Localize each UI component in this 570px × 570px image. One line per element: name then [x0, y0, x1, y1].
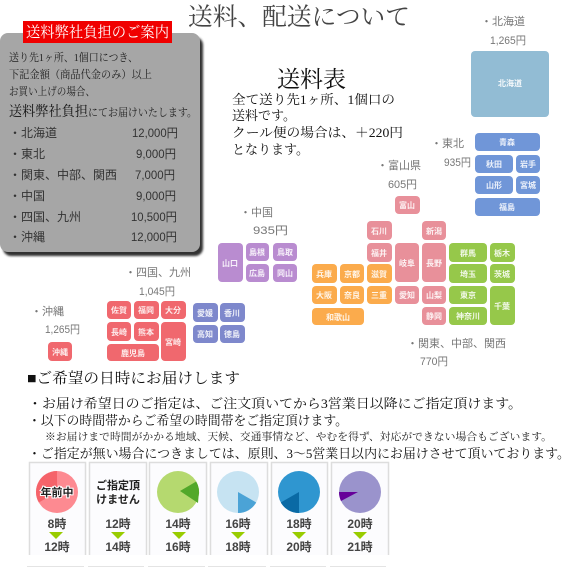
delivery notes: ※お届けまで時間がかかる地域、天候、交通事情など、やむを得ず、対応ができない場合もございます。 — [45, 430, 552, 443]
map: Shikoku: 香川 — [224, 308, 240, 318]
card: 14 to 16 — [150, 462, 206, 555]
card: 12 to 14 unavailable: 12時 — [105, 516, 131, 531]
label: Tohoku price — [431, 137, 471, 169]
panel price list: ・関東、中部、関西 — [9, 167, 117, 182]
map: Tohoku: 秋田 — [486, 159, 502, 169]
shipping table note — [232, 92, 403, 157]
map: Kanto — [449, 243, 515, 325]
map: Kansai: 大阪 — [316, 290, 332, 300]
card: 20 to 21: 21時 — [347, 539, 373, 554]
map: Tohoku: 山形 — [486, 180, 502, 190]
map: Tohoku: 岩手 — [520, 159, 536, 169]
map: Chubu: 愛知 — [399, 290, 415, 300]
delivery notes — [28, 396, 570, 461]
panel: free shipping guide — [0, 21, 203, 256]
map: Chugoku: 広島 — [249, 268, 265, 278]
label: Tohoku price: 935円 — [444, 157, 471, 169]
panel price list: 7,000円 — [135, 168, 175, 182]
card: 20 to 21 — [332, 462, 388, 555]
label: Hokkaido price: 1,265円 — [490, 35, 526, 47]
map: Chubu: 新潟 — [426, 226, 442, 236]
shipping table note: となります。 — [232, 142, 309, 157]
card: 8 to 12: 年前中 — [40, 485, 74, 499]
map: Hokkaido: 北海道 — [498, 78, 522, 88]
map: Toyama — [395, 196, 420, 214]
shipping table note: 全て送り先1ヶ所、1個口の — [232, 92, 395, 107]
panel intro text: 下記金額（商品代金のみ）以上 — [9, 67, 152, 81]
card: 8 to 12: 8時 — [48, 516, 66, 531]
panel heading: red label: 送料弊社負担のご案内 — [26, 24, 169, 41]
map: Chubu: 福井 — [371, 248, 387, 258]
map: Kanto: 茨城 — [494, 269, 510, 279]
map: Chugoku: 岡山 — [277, 269, 293, 278]
card: 18 to 20: 18時 — [286, 516, 312, 531]
card: 16 to 18: 18時 — [225, 539, 251, 554]
panel intro text: お買い上げの場合、 — [9, 84, 95, 98]
panel heading: red label — [23, 21, 172, 43]
map: Kanto: 栃木 — [494, 248, 510, 258]
card: 14 to 16: 14時 — [165, 516, 191, 531]
label: Chugoku price: ・中国 — [240, 206, 273, 219]
label: Toyama price: ・富山県 — [377, 159, 421, 172]
map: Kanto: 東京 — [460, 290, 476, 300]
panel price list: 12,000円 — [132, 126, 178, 140]
label: Hokkaido price — [481, 14, 526, 47]
card: 8 to 12: 12時 — [44, 539, 70, 554]
label: Kanto, Chubu, Kansai price — [407, 337, 506, 368]
panel price list: 10,500円 — [131, 210, 177, 224]
map: Kyushu: 佐賀 — [111, 305, 127, 315]
label: Hokkaido price: ・北海道 — [481, 14, 525, 28]
panel intro text: 送り先1ヶ所、1個口につき、 — [9, 50, 138, 64]
map: Kanto, Chubu, Kansai — [312, 221, 515, 325]
map: Chubu: 山梨 — [426, 290, 442, 300]
label: Okinawa price: ・沖縄 — [31, 305, 64, 318]
shipping table heading: 送料表 — [277, 67, 346, 92]
panel price list: ・中国 — [9, 188, 45, 203]
card: 12 to 14 unavailable: けません — [96, 493, 140, 506]
delivery notes: ・ご指定が無い場合につきましては、原則、3～5営業日以内にお届けさせて頂いております。 — [28, 446, 570, 461]
map: Kansai: 兵庫 — [316, 269, 332, 279]
map: Kansai: 奈良 — [344, 290, 360, 300]
map: Kyushu: 福岡 — [138, 305, 154, 315]
card: 18 to 20 — [272, 462, 328, 555]
title: 送料、配送について — [188, 3, 410, 31]
card: 20 to 21: 20時 — [347, 516, 373, 531]
shipping table note: 送料です。 — [232, 108, 296, 123]
label: Shikoku, Kyushu price: ・四国、九州 — [125, 266, 191, 279]
label: Toyama price: 605円 — [388, 179, 417, 191]
map: Shikoku: 愛媛 — [197, 308, 213, 318]
map: Tohoku — [475, 133, 540, 216]
card: 12 to 14 unavailable — [90, 462, 146, 555]
map: Shikoku: 高知 — [197, 329, 213, 339]
map: Chugoku: 島根 — [249, 247, 265, 257]
time slot cards — [27, 462, 388, 566]
shipping table note: クール便の場合は、＋220円 — [232, 125, 403, 140]
map: Kanto: 神奈川 — [456, 311, 480, 321]
card: 16 to 18: 16時 — [225, 516, 251, 531]
panel price list: ・沖縄 — [9, 230, 45, 244]
map: Kyushu: 大分 — [165, 305, 181, 315]
delivery notes: ・以下の時間帯からご希望の時間帯をご指定頂けます。 — [28, 413, 348, 428]
label: Tohoku price: ・東北 — [431, 137, 464, 150]
map: Tohoku: 宮城 — [520, 180, 536, 190]
map: Kyushu: 長崎 — [111, 327, 127, 337]
card: 16 to 18 — [210, 462, 268, 555]
label: Shikoku, Kyushu price — [125, 266, 191, 298]
map: Kanto: 埼玉 — [460, 269, 476, 279]
map: Okinawa — [48, 342, 72, 361]
card: 14 to 16: 16時 — [165, 539, 191, 554]
label: Okinawa price — [31, 305, 80, 336]
map: Chugoku — [218, 243, 297, 282]
map: Kansai: 和歌山 — [326, 312, 350, 322]
map: Chubu: 長野 — [426, 259, 442, 268]
map: Kyushu — [107, 301, 186, 361]
map: Hokkaido — [471, 51, 549, 117]
map: Kanto: 千葉 — [494, 301, 510, 311]
delivery notes: ・お届け希望日のご指定は、ご注文頂いてから3営業日以降にご指定頂けます。 — [28, 396, 522, 411]
label: Kanto, Chubu, Kansai price: ・関東、中部、関西 — [407, 337, 506, 350]
map: Chubu — [367, 221, 446, 325]
map: Chubu: 静岡 — [426, 311, 442, 321]
map: Shikoku — [193, 303, 245, 343]
map: Kansai: 三重 — [371, 290, 387, 300]
panel price list: ・北海道 — [9, 126, 57, 140]
panel intro text: にてお届けいたします。 — [88, 106, 197, 119]
map: Chubu: 岐阜 — [399, 258, 415, 268]
panel price list: 12,000円 — [131, 230, 177, 244]
map: Kansai — [312, 264, 392, 325]
map: Toyama: 富山 — [399, 200, 415, 210]
map: Chugoku: 鳥取 — [277, 247, 293, 257]
card: 18 to 20: 20時 — [286, 539, 312, 554]
panel price list: ・四国、九州 — [9, 210, 81, 224]
card: 12 to 14 unavailable: ご指定頂 — [96, 478, 140, 492]
label: Okinawa price: 1,265円 — [45, 324, 80, 336]
card bottom fragments — [27, 566, 386, 568]
map: Kanto: 群馬 — [460, 248, 476, 258]
map: Kansai: 京都 — [344, 269, 360, 279]
map: Kyushu: 鹿児島 — [121, 348, 145, 358]
map: Shikoku: 徳島 — [224, 329, 240, 339]
map: Okinawa: 沖縄 — [52, 347, 68, 357]
delivery heading: ■ご希望の日時にお届けします — [27, 369, 240, 387]
panel price list — [9, 126, 178, 244]
label: Kanto, Chubu, Kansai price: 770円 — [420, 356, 448, 368]
panel intro text: 送料弊社負担 — [9, 103, 88, 120]
map: Chubu: 石川 — [371, 227, 387, 236]
map: Kyushu: 熊本 — [138, 327, 154, 337]
map: Kyushu: 宮崎 — [165, 337, 181, 347]
panel intro text — [9, 50, 197, 120]
label: Toyama price — [377, 159, 421, 191]
panel price list: 9,000円 — [136, 189, 176, 203]
panel price list: ・東北 — [9, 147, 45, 161]
card: 8 to 12 — [30, 462, 86, 555]
map: Tohoku: 青森 — [499, 137, 515, 147]
map: Kansai: 滋賀 — [371, 269, 387, 279]
label: Chugoku price: 935円 — [253, 225, 288, 237]
label: Shikoku, Kyushu price: 1,045円 — [139, 286, 175, 298]
map: Chugoku: 山口 — [222, 259, 238, 268]
label: Chugoku price — [240, 206, 288, 237]
panel price list: 9,000円 — [136, 147, 176, 161]
map: Tohoku: 福島 — [499, 202, 515, 212]
card: 12 to 14 unavailable: 14時 — [105, 539, 131, 554]
